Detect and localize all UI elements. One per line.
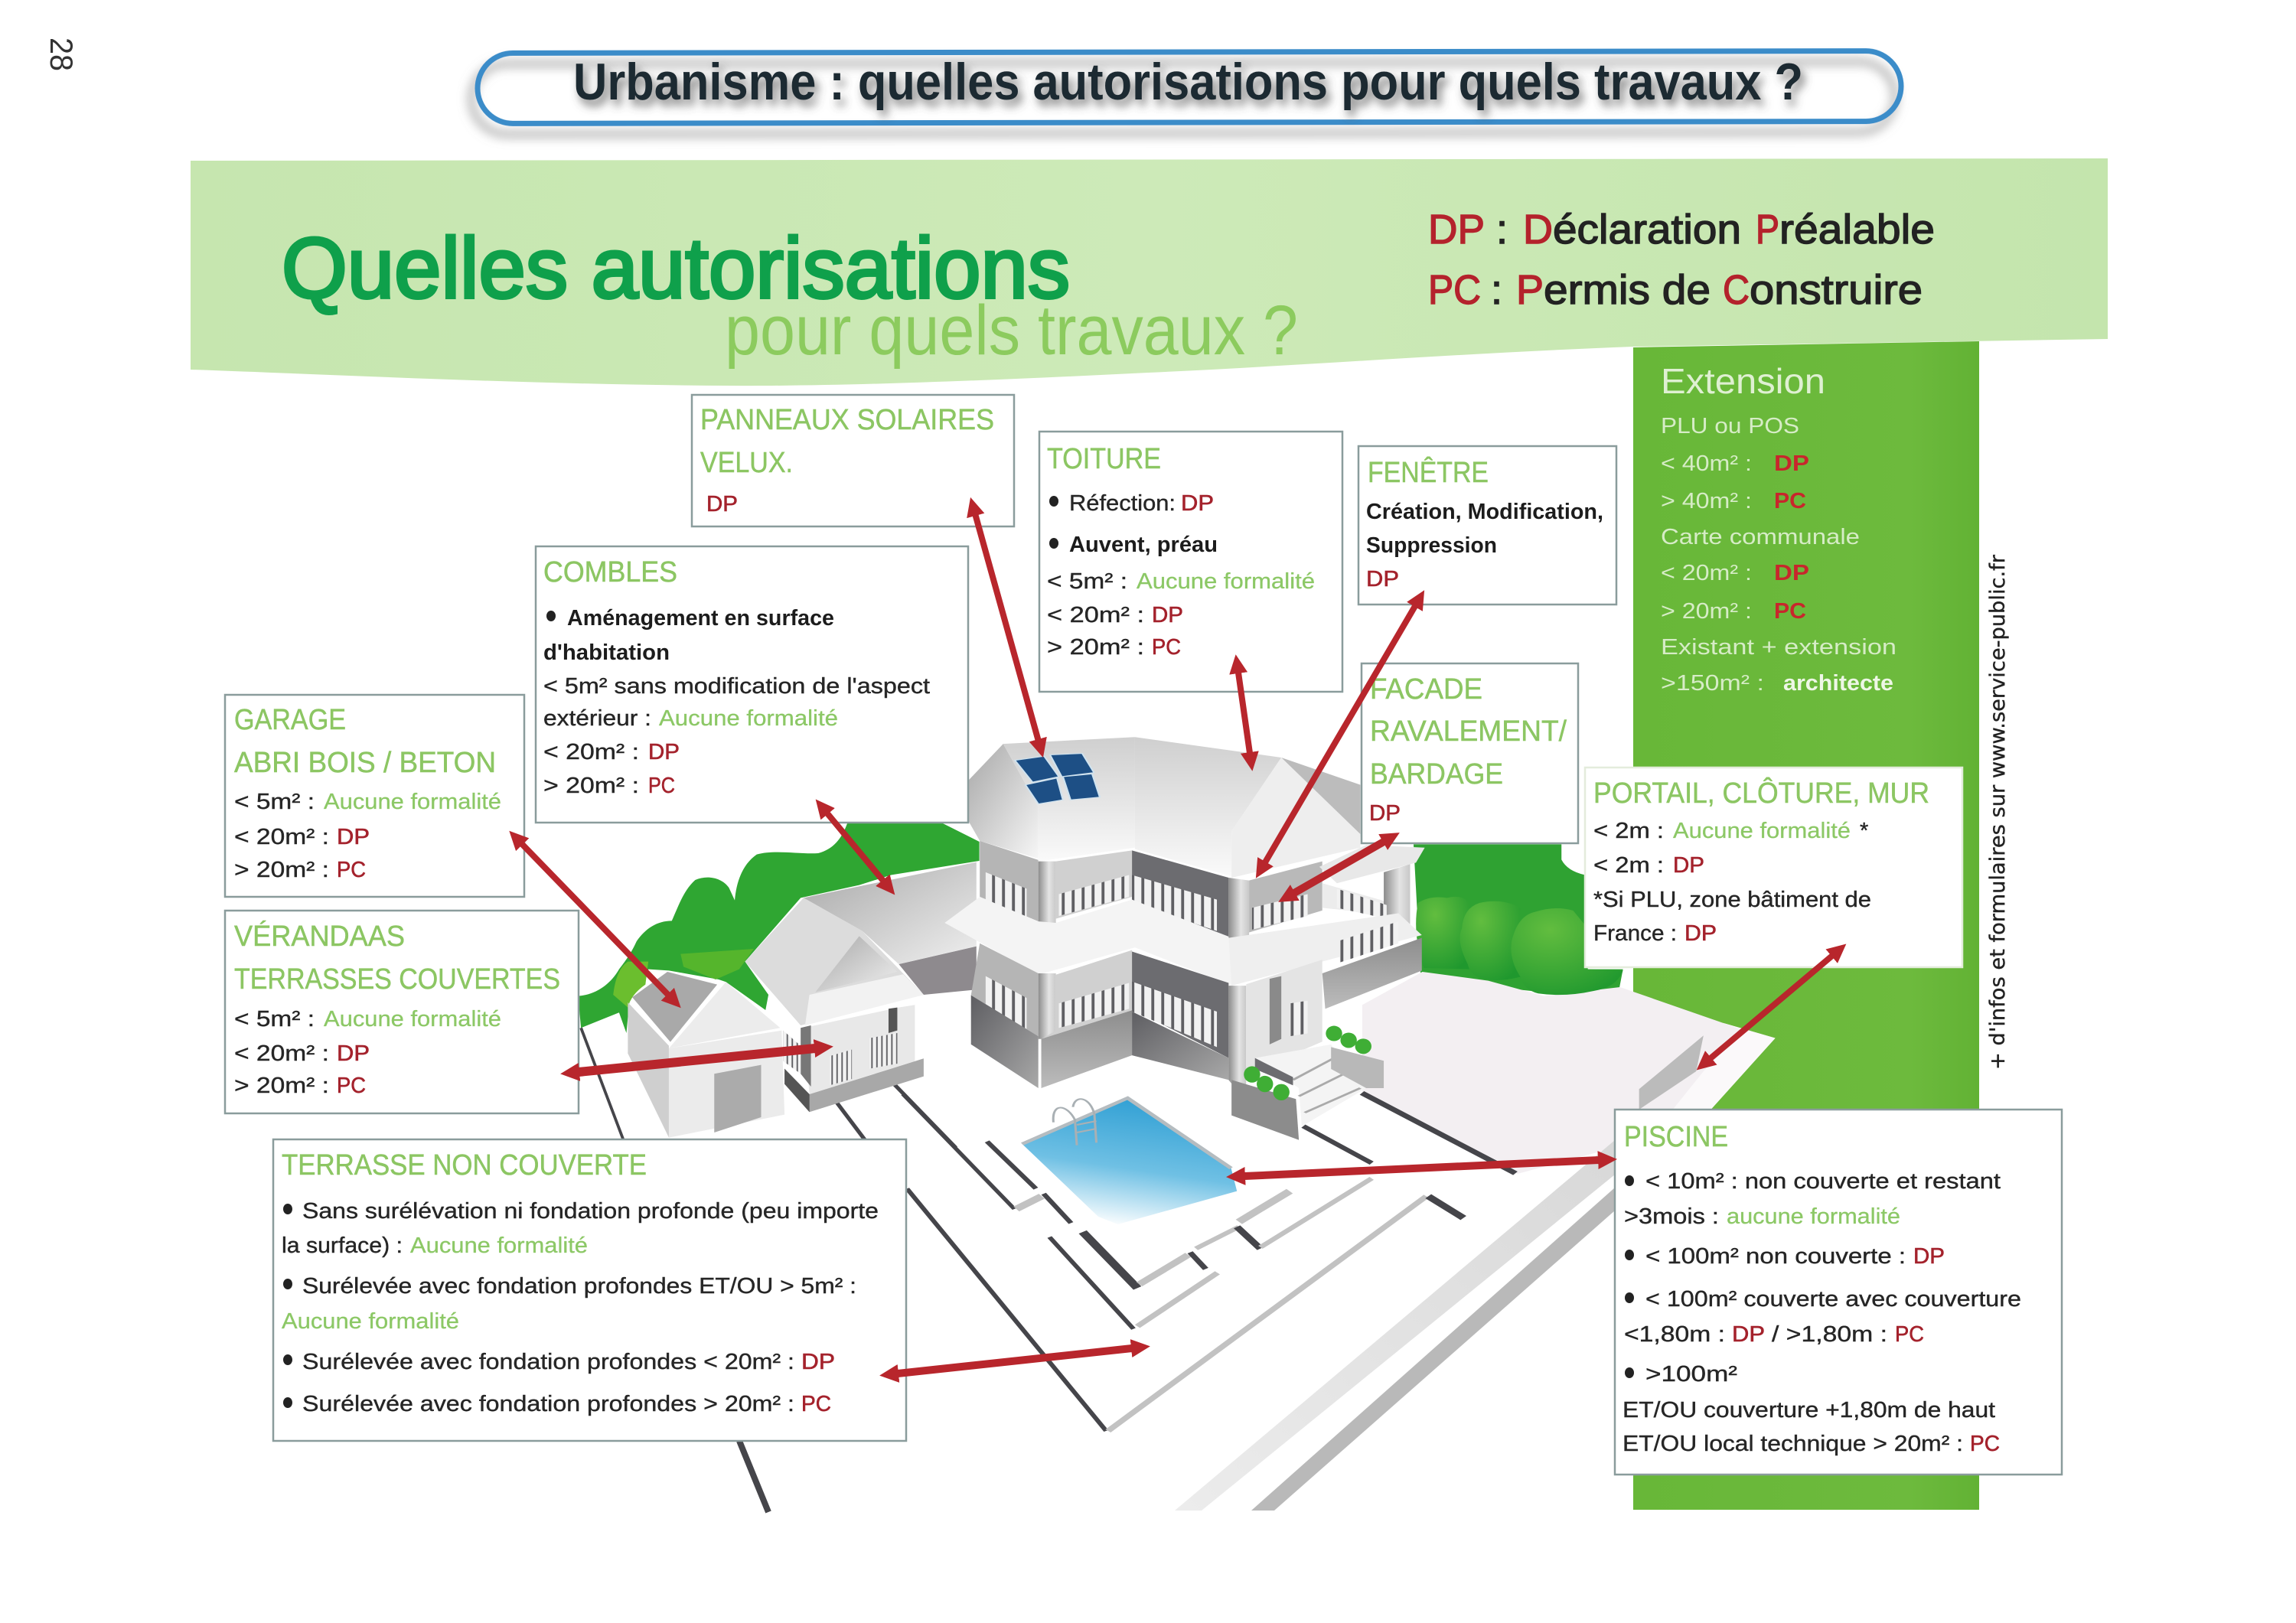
slab [1362, 972, 1776, 1174]
rules: Aménagement en surface [567, 606, 834, 631]
heading: TOITURE [1047, 443, 1161, 475]
rules: France : [1593, 921, 1677, 946]
box frame [273, 1139, 906, 1441]
rules: DP [1152, 603, 1183, 627]
legend: DP and PC definitions: ermis de [1544, 267, 1711, 313]
rules: < 10m² : non couverte et restant [1645, 1169, 2001, 1194]
heading: PANNEAUX SOLAIRES [700, 404, 994, 436]
heading: PORTAIL, CLÔTURE, MUR [1593, 776, 1929, 810]
extension rules: > 20m² : [1661, 599, 1752, 624]
rules: Aucune formalité [282, 1309, 459, 1334]
legend: DP and PC definitions: P [1516, 267, 1544, 313]
arrow: garage [522, 844, 668, 995]
rules: Aucune formalité [1137, 569, 1315, 594]
terrace walls [903, 1093, 1515, 1431]
rules: Suppression [1366, 533, 1497, 558]
extension rules: architecte [1783, 671, 1893, 696]
rules: Aucune formalité [659, 706, 838, 731]
rules: DP [1366, 567, 1399, 592]
rule: DP [1369, 801, 1401, 826]
panel: panneaux solaires [692, 395, 1014, 526]
left hedge and annex [578, 823, 980, 1138]
rules: > 20m² : [234, 1074, 329, 1098]
roof [968, 737, 1425, 883]
extension rules: Carte communale [1661, 525, 1860, 549]
rules: ET/OU couverture +1,80m de haut [1623, 1398, 1995, 1423]
rules: Sans surélévation ni fondation profonde (peu importe [302, 1199, 879, 1224]
pool and terrace walls [903, 1093, 1515, 1431]
rules: < 100m² non couverte : [1645, 1244, 1906, 1269]
heading: FACADE [1370, 673, 1482, 706]
heading: GARAGE [234, 704, 346, 736]
floor slabs [944, 897, 1422, 986]
box frame [225, 695, 524, 897]
heading [234, 704, 496, 779]
box frame [536, 546, 968, 823]
planters [1231, 1026, 1384, 1140]
path outlines left [581, 1028, 956, 1148]
heading: VELUX. [700, 447, 793, 479]
heading: BARDAGE [1370, 758, 1503, 790]
rules: extérieur : [543, 706, 651, 731]
legend: DP and PC definitions: P [1756, 207, 1779, 253]
extension rules: >150m² : [1661, 671, 1764, 696]
heading: VÉRANDAAS [234, 920, 405, 953]
illustration: house and grounds [578, 737, 1776, 1512]
slab rim [1673, 1023, 1776, 1110]
solar panels [1015, 754, 1100, 804]
panel: vérandas [225, 911, 579, 1113]
rules: * [1860, 819, 1868, 843]
rules: d'habitation [543, 640, 670, 665]
heading: TERRASSES COUVERTES [234, 963, 560, 996]
entry steps [1255, 1045, 1366, 1126]
box frame [225, 911, 579, 1113]
rules: DP [1684, 921, 1717, 946]
rules [1366, 500, 1603, 592]
rules [1593, 819, 1871, 946]
rules: < 5m² sans modification de l'aspect [543, 674, 930, 699]
rules: Surélevée avec fondation profondes ET/OU > 5m² : [302, 1274, 856, 1299]
box frame [1358, 446, 1616, 605]
panel: portail clôture mur [1585, 768, 1962, 967]
rules: < 5m² : [234, 1007, 315, 1031]
rules: DP [337, 825, 370, 849]
rules: PC [337, 1074, 366, 1098]
extension rules: PLU ou POS [1661, 414, 1799, 438]
legend: DP and PC definitions: C [1723, 267, 1750, 313]
stripes: driveway [1175, 1140, 1615, 1511]
rules: < 20m² : [1047, 603, 1144, 627]
rules: Surélevée avec fondation profondes < 20m² : [302, 1350, 794, 1374]
light shrubs [613, 949, 754, 1008]
rules: PC [648, 774, 675, 798]
rules: Création, Modification, [1366, 500, 1603, 524]
panel: toiture [1039, 432, 1342, 692]
heading: ABRI BOIS / BETON [234, 747, 496, 779]
pool ladder [1053, 1099, 1097, 1146]
title text: Urbanisme : quelles autorisations pour quels travaux ? [573, 53, 1803, 111]
rules: > 20m² : [1047, 635, 1144, 660]
heading: RAVALEMENT/ [1370, 715, 1567, 748]
legend: DP and PC definitions: D [1523, 207, 1553, 253]
rules: *Si PLU, zone bâtiment de [1593, 888, 1871, 912]
panel: façade [1362, 663, 1578, 843]
panel: garage [225, 695, 524, 897]
arrow: veranda [579, 1048, 815, 1072]
rule: DP [706, 492, 738, 517]
rules: DP [337, 1041, 370, 1066]
rules: PC [1970, 1432, 2000, 1456]
pool rim [1022, 1098, 1231, 1168]
rules: < 20m² : [234, 825, 329, 849]
rules: > 20m² : [234, 858, 329, 882]
rules: DP [1913, 1244, 1945, 1269]
box frame [1039, 432, 1342, 692]
box frame [1362, 663, 1578, 843]
box frame [1615, 1110, 2062, 1475]
extension rules: DP [1774, 561, 1809, 585]
panel: fenêtre [1358, 446, 1616, 605]
extension heading: Extension [1661, 361, 1825, 401]
rules: < 2m : [1593, 819, 1664, 843]
legend: DP and PC definitions: éclaration [1553, 207, 1741, 253]
rules [1623, 1169, 2021, 1456]
main house [944, 737, 1425, 1140]
extension rules: < 40m² : [1661, 451, 1752, 476]
rules [543, 606, 930, 798]
rules: >3mois : [1624, 1204, 1719, 1229]
panel: extension [1633, 341, 1979, 1510]
rules: DP [801, 1350, 835, 1374]
rules: Auvent, préau [1069, 533, 1218, 557]
panel: combles [536, 546, 968, 823]
rules: PC [337, 858, 366, 882]
rules: < 2m : [1593, 853, 1664, 878]
rules: ET/OU local technique > 20m² : [1623, 1432, 1963, 1456]
hedge: left [578, 823, 980, 1033]
rules [234, 1007, 501, 1098]
arrows: labels to house [522, 515, 1832, 1374]
rules: PC [801, 1392, 831, 1416]
heading: TERRASSE NON COUVERTE [282, 1149, 647, 1181]
annex building [745, 862, 977, 1112]
arrow: facade [1294, 842, 1384, 893]
rules: Aucune formalité [324, 1007, 501, 1031]
upper floor [980, 841, 1410, 938]
pool water [1022, 1098, 1237, 1224]
legend: DP and PC definitions: DP [1428, 207, 1485, 253]
rules: Aucune formalité [410, 1234, 588, 1258]
panel: green header band [191, 158, 2108, 386]
legend: DP and PC definitions [1428, 207, 1935, 313]
lower floor [971, 938, 1422, 1102]
heading [1370, 673, 1567, 790]
box frame [692, 395, 1014, 526]
rules: < 5m² : [1047, 569, 1127, 594]
rules [1047, 491, 1315, 660]
rules: Aucune formalité [1673, 819, 1851, 843]
extension rules: PC [1774, 489, 1806, 513]
legend: DP and PC definitions: PC [1428, 267, 1481, 313]
extension rules: > 40m² : [1661, 489, 1752, 513]
arrow: attic [827, 813, 883, 881]
rules: DP [1732, 1322, 1765, 1347]
rules: DP [1673, 853, 1704, 878]
arrow: terrace [898, 1348, 1132, 1374]
panel: piscine [1615, 1110, 2062, 1475]
hedge: right [1414, 844, 1623, 1000]
rules: < 20m² : [234, 1041, 329, 1066]
rules: <1,80m : [1624, 1322, 1725, 1347]
rules: > 20m² : [543, 774, 639, 798]
rules: Surélevée avec fondation profondes > 20m² : [302, 1392, 794, 1416]
side note: service-public: + d'infos et formulaires sur www.service-public.fr [1986, 554, 2010, 1070]
rules: Aucune formalité [324, 790, 501, 814]
garage shed [628, 972, 784, 1138]
rules: >100m² [1645, 1362, 1737, 1387]
rules [234, 790, 501, 882]
rules: DP [648, 740, 680, 764]
title banner [478, 51, 1901, 123]
subheading: pour quels travaux: pour quels travaux ? [725, 292, 1298, 370]
extension rules: PC [1774, 599, 1806, 624]
extension rules: < 20m² : [1661, 561, 1752, 585]
legend: DP and PC definitions: onstruire [1750, 267, 1923, 313]
rules: < 5m² : [234, 790, 315, 814]
heading [700, 404, 994, 479]
heading [234, 920, 560, 996]
extension rules: Existant + extension [1661, 635, 1896, 660]
arrow: window [1265, 606, 1415, 862]
page number: 28 [44, 37, 80, 71]
rules: < 20m² : [543, 740, 639, 764]
heading: quelles autorisations: Quelles autorisations [282, 220, 1070, 316]
wall block at portal [1639, 1035, 1704, 1110]
heading: FENÊTRE [1368, 456, 1489, 489]
arrow: solar panels [975, 515, 1038, 740]
rules: / >1,80m : [1772, 1322, 1887, 1347]
heading: PISCINE [1624, 1121, 1728, 1153]
extension rules [1661, 414, 1896, 696]
arrow: pool [1244, 1160, 1599, 1176]
rules: la surface) : [282, 1234, 403, 1258]
arrow: roof [1238, 673, 1250, 753]
arrow: gate [1711, 956, 1832, 1058]
rules: aucune formalité [1727, 1204, 1900, 1229]
title pill [478, 51, 1901, 123]
legend: DP and PC definitions: : [1496, 207, 1508, 253]
rules: < 100m² couverte avec couverture [1645, 1287, 2021, 1312]
panel: terrasse non couverte [273, 1139, 906, 1441]
ground: right slab and hedge [1362, 844, 1776, 1174]
rules: DP [1181, 491, 1214, 516]
rules: PC [1895, 1322, 1924, 1347]
legend: DP and PC definitions: réalable [1779, 207, 1935, 253]
box frame [1585, 768, 1962, 967]
legend: DP and PC definitions: : [1491, 267, 1502, 313]
extension rules: DP [1774, 451, 1809, 476]
heading: COMBLES [543, 556, 677, 588]
extension green column [1633, 341, 1979, 1510]
rules: Réfection: [1069, 491, 1176, 516]
shrubs [1416, 897, 1623, 995]
rules [282, 1199, 879, 1416]
rules: PC [1152, 635, 1181, 660]
